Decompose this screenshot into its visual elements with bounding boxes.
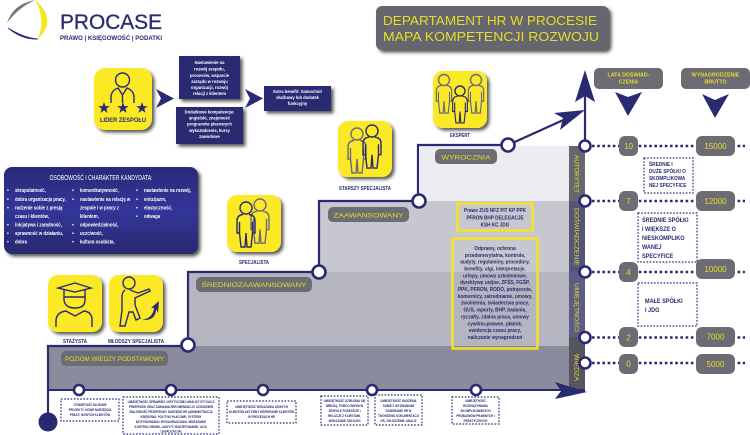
box: extra benefit [264, 86, 331, 111]
strip: skala kompetencji: AUTORYTET [572, 155, 580, 193]
skill note 4: WSKAZANIE SZKOLEŃ [329, 418, 361, 423]
callout: odprawy i kadry: komornicy, zatrudnianie, umowy, [458, 294, 533, 300]
arrow: diagonal head [554, 110, 585, 130]
box: nastawienie: rozwój zespołu, [194, 66, 225, 72]
logo: PRAWO | KSIĘGOWOŚĆ | PODATKI [60, 34, 162, 42]
callout: odprawy i kadry: benefity, ulgi, interpretacje, [464, 266, 526, 273]
skill note 4: RELACJE Z KLIENTAMI, [328, 414, 361, 418]
skill note 5: DOBORANIE HR W [386, 409, 412, 413]
start node [38, 412, 58, 432]
list bullets: • [7, 206, 9, 212]
box: extra benefit: funkcyjny [288, 101, 308, 106]
arrow: lata down [615, 92, 642, 116]
stair line [48, 117, 570, 422]
note: małe spółki: I JDG [645, 308, 660, 314]
arrow: wynagrodzenie down [702, 94, 729, 118]
list column 2: klientem, [80, 214, 99, 220]
icon card: stażysta [48, 275, 102, 345]
arrow: bottom axis head [555, 382, 587, 399]
skill note 2: KSIĘGOWA, POLITYKI PŁACOWE, SYSTEMY [140, 415, 202, 419]
level pill: poziom wiedzy podstawowy [61, 351, 168, 366]
skill note 2: MOTYWOWANIA I WYNAGRADZANIA, WDRAŻANIE [136, 419, 206, 424]
skill note 2: PRZEPISÓW ORAZ ZAWIANIA REKOMENDACJI I UZGODNIEŃ [129, 404, 214, 409]
title: DEPARTAMENT HR W PROCESIE [383, 14, 597, 28]
list bullets: • [7, 188, 9, 194]
panel: osobowość i charakter kandydata [4, 167, 198, 254]
box: nastawienie: zarządu w rozwoju [191, 79, 228, 84]
panel heading: OSOBOWOŚĆ I CHARAKTER KANDYDATA: [50, 173, 153, 182]
logo: PROCASE [60, 11, 162, 34]
skill note 4: WIEDZĄ, POMOC INNYM W [326, 404, 363, 408]
skill note 6: SKOMPLIKOWANYCH [460, 409, 491, 413]
skill note 6: ROZWIĄZYWANIA [463, 404, 489, 408]
salary chips [696, 136, 735, 374]
list bullets: • [136, 197, 138, 203]
skill note 6: PRAKTYCZNYCH [464, 419, 488, 423]
skill note 5: UMIEJĘTNOŚĆ RADZENIA [380, 398, 417, 403]
skill note 2: UMIEJĘTNOŚĆ SPRAWNEJ I KRYTYCZNEJ ANALIZY SYTUACJI [128, 399, 214, 404]
callout: prawo: Prawo ZUS NFZ PIT KP PPK [464, 208, 526, 214]
list column 1: czasu i klientów, [15, 214, 50, 220]
callout: odprawy i kadry: ryczałty, zdalna praca, umowy [461, 314, 529, 321]
note: średnie spółki i większe: NIESKOMPLIKO [642, 236, 685, 242]
note: średnie spółki i większe: ŚREDNIE SPÓŁKI [642, 216, 689, 224]
skill note 3: UMIEJĘTNOŚĆ WSKAZANIA NOWYCH [235, 404, 289, 409]
column header: wynagrodzenie brutto: BRUTTO [705, 80, 726, 86]
dotted experience and salary rows [592, 146, 745, 363]
skill note 1: OTWARTOŚĆ NA NOWE [73, 402, 107, 407]
skill note 3 [227, 401, 296, 423]
callout: odprawy i kadry: naliczanie wynagrodzeń [468, 335, 522, 341]
list column 2: zespole i w pracy z [80, 205, 120, 212]
skill note 2 [123, 397, 219, 434]
salary chips: 10000 [704, 265, 727, 274]
experience chips: 2 [626, 334, 631, 342]
column header: wynagrodzenie brutto [681, 68, 750, 89]
list bullets [7, 188, 138, 246]
callout: odprawy i kadry: ewidencja czasu pracy, [469, 328, 522, 334]
level pill: wyrocznia [435, 149, 497, 164]
skill note 4: ZESPOLE PODEJŚCIE I [328, 408, 361, 413]
list column 2: odpowiedzialność, [80, 222, 119, 229]
skill note 2: KONTROLI WEWN., AUDYTY, BUDŻETOWANIE, ULGI, [135, 424, 207, 429]
callout: odprawy i kadry: urlopy, umowy szkoleniowe, [463, 273, 528, 280]
callout: odprawy i kadry: PPK, PFRON, RODO, potrącenia, [458, 287, 533, 293]
strip: skala kompetencji: DOŚWIADCZENIE [572, 208, 582, 267]
callout: odprawy i kadry: przedemerytalna, kontrole, [465, 253, 526, 259]
icon card: młodszy specjalista: MŁODSZY SPECJALISTA [108, 339, 164, 345]
callout: prawo: KSH KC JDG [481, 222, 509, 229]
skill note 4 [321, 396, 368, 425]
skill note 2: ZNAJOMOŚĆ PRZEPISÓW I NARZĘDZI HR (ADMINISTRACJA [129, 409, 213, 414]
icon card: specjalista [227, 195, 281, 266]
column header: lata doświadczenia [594, 68, 663, 89]
list bullets: • [72, 197, 74, 203]
box: dodatkowe kompetencje: programów płacowych [187, 121, 232, 127]
skill note 1: PROJEKTY, NOWE NARZĘDZIA [69, 408, 112, 412]
list column 3: elastyczność, [144, 205, 173, 212]
callout: odprawy i kadry [452, 238, 538, 348]
skill note 4: UMIEJĘTNOŚĆ DZIELENIA SIĘ [324, 398, 365, 403]
note: średnie spółki i większe: WANEJ [642, 245, 662, 251]
list bullets: • [7, 222, 9, 228]
title: MAPA KOMPETENCJI ROZWOJU [383, 30, 599, 44]
arrow: vertical axis [575, 70, 595, 146]
callout: odprawy i kadry: dyrektywy unijne, ZFŚS, FGŚP, [460, 279, 530, 286]
list column 1 [15, 188, 66, 246]
icon card: specjalista: SPECJALISTA [239, 260, 269, 266]
callout: odprawy i kadry: cywilno-prawne, płatnik, [467, 321, 523, 327]
callout: odprawy i kadry: GUS, raporty, BHP, badania, [463, 307, 527, 314]
note: średnie i duże spółki: NEJ SPECYFICE [649, 183, 687, 189]
skill note 6: PROBLEMÓW PRAWNYCH I [456, 413, 495, 418]
note: średnie spółki i większe [638, 213, 697, 262]
level pill: średniozaawansowany: ŚREDNIOZAAWANSOWANY [202, 280, 307, 289]
box: dodatkowe kompetencje [176, 107, 243, 144]
list column 1: dobra [15, 239, 27, 246]
list column 2: nastawienie na relację w [80, 197, 131, 203]
strip: skala kompetencji: UMIEJĘTNOŚCI [572, 283, 582, 332]
box: nastawienie: procesów, wsparcie [190, 73, 230, 78]
icon card: młodszy specjalista [108, 275, 164, 345]
box: dodatkowe kompetencje: Dodatkowe kompetencje: [185, 109, 235, 115]
box: nastawienie: Nastawienie na [195, 60, 225, 65]
skill note 1: PRACY, NOWYCH KLIENTÓW [70, 412, 110, 417]
skill note 5 [375, 395, 422, 425]
experience chips: 10 [624, 142, 633, 151]
experience chips: 0 [626, 360, 631, 368]
note: małe spółki: MAŁE SPÓŁKI [645, 297, 683, 305]
level pill: średniozaawansowany [196, 277, 312, 292]
list bullets: • [72, 222, 74, 228]
note: średnie i duże spółki: ŚREDNIE I [649, 161, 673, 168]
note: średnie i duże spółki [644, 158, 693, 193]
box: dodatkowe kompetencje: angielski, znajomość [189, 115, 231, 121]
callout: odprawy i kadry: Odprawy, ochrona [474, 246, 516, 252]
skill note 5: TWORZENIU DOKUMENTACJI [378, 414, 419, 418]
list column 2: kultura osobista, [80, 239, 115, 246]
box: extra benefit: Extra benefit: Samochód [273, 89, 322, 94]
logo [7, 0, 162, 42]
axis nodes [580, 140, 590, 368]
column header: lata doświadczenia: LATA DOŚWIAD- [608, 72, 650, 78]
strip: skala kompetencji: WIEDZA [572, 354, 580, 382]
icon card: starszy specjalista [338, 121, 392, 192]
skill note 2: LEGALIZACJA) [161, 429, 181, 434]
note: średnie i duże spółki: DUŻE SPÓŁKI O [649, 167, 686, 175]
staircase chart: poziomy wiedzy [48, 117, 585, 422]
strip: skala kompetencji [569, 146, 585, 392]
list bullets: • [7, 197, 9, 203]
list bullets: • [7, 231, 9, 237]
skill note 6: UMIEJĘTNOŚĆ [465, 398, 487, 403]
list bullets: • [7, 240, 9, 246]
icon card: ekspert: EKSPERT [450, 133, 470, 139]
list bullets: • [136, 214, 138, 220]
skill note 6 [452, 397, 499, 424]
arrow: kompetencje to benefit [245, 89, 263, 108]
box: dodatkowe kompetencje: wykształcenie, kursy [188, 128, 230, 133]
salary chips: 5000 [707, 360, 725, 369]
callout: odprawy i kadry: audyty, regulaminy, procedury, [460, 259, 530, 266]
level pill: zaawansowany [328, 207, 409, 222]
list column 1: inicjatywa i zaradność, [15, 222, 63, 229]
list column 1: dobra organizacja pracy, [15, 197, 66, 203]
column header: lata doświadczenia: CZENIA [619, 80, 639, 86]
list column 2: komunikatywność, [80, 188, 119, 194]
list bullets: • [72, 188, 74, 194]
list bullets: • [136, 188, 138, 194]
skill note 5: SOBIE Z WYZWANIAMI [383, 404, 414, 408]
box: dodatkowe kompetencje: zawodowe [199, 134, 220, 139]
list bullets: • [136, 206, 138, 212]
salary chips: 7000 [707, 332, 725, 342]
list column 3: entuzjazm, [144, 197, 167, 203]
list bullets: • [72, 231, 74, 237]
list column 3: nastawienie na rozwój, [144, 188, 192, 194]
note: średnie spółki i większe: SPECYFICE [642, 254, 673, 260]
note: małe spółki [638, 283, 697, 326]
icon card: lider zespołu: LIDER ZESPOŁU [100, 118, 146, 124]
list column 2: uczciwość, [80, 231, 103, 237]
list column 2 [80, 188, 131, 246]
note: średnie spółki i większe: I WIĘKSZE O [642, 227, 676, 233]
list column 1: skrupulatność, [15, 188, 46, 194]
skill note 5: HR, ZGŁOSZENIE, ANALIZ [381, 419, 417, 423]
box: nastawienie [179, 56, 240, 99]
experience chips [619, 136, 638, 374]
callout: prawo [458, 204, 532, 230]
box: nastawienie: relacji z klientem [193, 91, 226, 96]
salary chips: 12000 [704, 197, 727, 206]
salary chips: 15000 [704, 142, 727, 151]
box: nastawienie: organizacji, rozwój [191, 85, 228, 90]
stair nodes [74, 138, 514, 395]
list column 3: odwaga [144, 214, 160, 220]
skill note 3: KLIENTÓW AKTYWNY WSPIERANIE KLIENTÓW [229, 409, 294, 414]
title [376, 6, 609, 50]
note: średnie i duże spółki: SKOMPLIKOWA [649, 176, 686, 182]
list column 3 [144, 188, 192, 220]
experience chips: 4 [626, 268, 631, 277]
arrow: lider to kompetencje [156, 89, 174, 108]
icon card: stażysta: STAŻYSTA [63, 338, 87, 345]
callout: odprawy i kadry: zwolnienia, świadectwa pracy, [461, 300, 530, 307]
level pill: wyrocznia: WYROCZNIA [442, 154, 491, 162]
icon card: lider zespołu [94, 68, 152, 130]
icon card: ekspert [433, 71, 487, 139]
skill note 3: W PROCESACH HR [248, 415, 276, 419]
experience chips: 7 [626, 197, 631, 206]
icon card: starszy specjalista: STARSZY SPECJALISTA [339, 186, 391, 192]
column header: wynagrodzenie brutto: WYNAGRODZENIE [692, 72, 740, 78]
skill note 1 [61, 399, 119, 421]
list bullets: • [72, 240, 74, 246]
list column 1: radzenie sobie z presją [15, 205, 63, 212]
callout: prawo: PFRON BHP DELEGACJE [466, 215, 524, 222]
level pill: zaawansowany: ZAAWANSOWANY [334, 212, 404, 220]
level pill: poziom wiedzy podstawowy: POZIOM WIEDZY PODSTAWOWY [65, 356, 165, 363]
list column 1: sprawność w działaniu, [15, 231, 64, 237]
box: extra benefit: służbowy lub dodatek [276, 95, 319, 100]
